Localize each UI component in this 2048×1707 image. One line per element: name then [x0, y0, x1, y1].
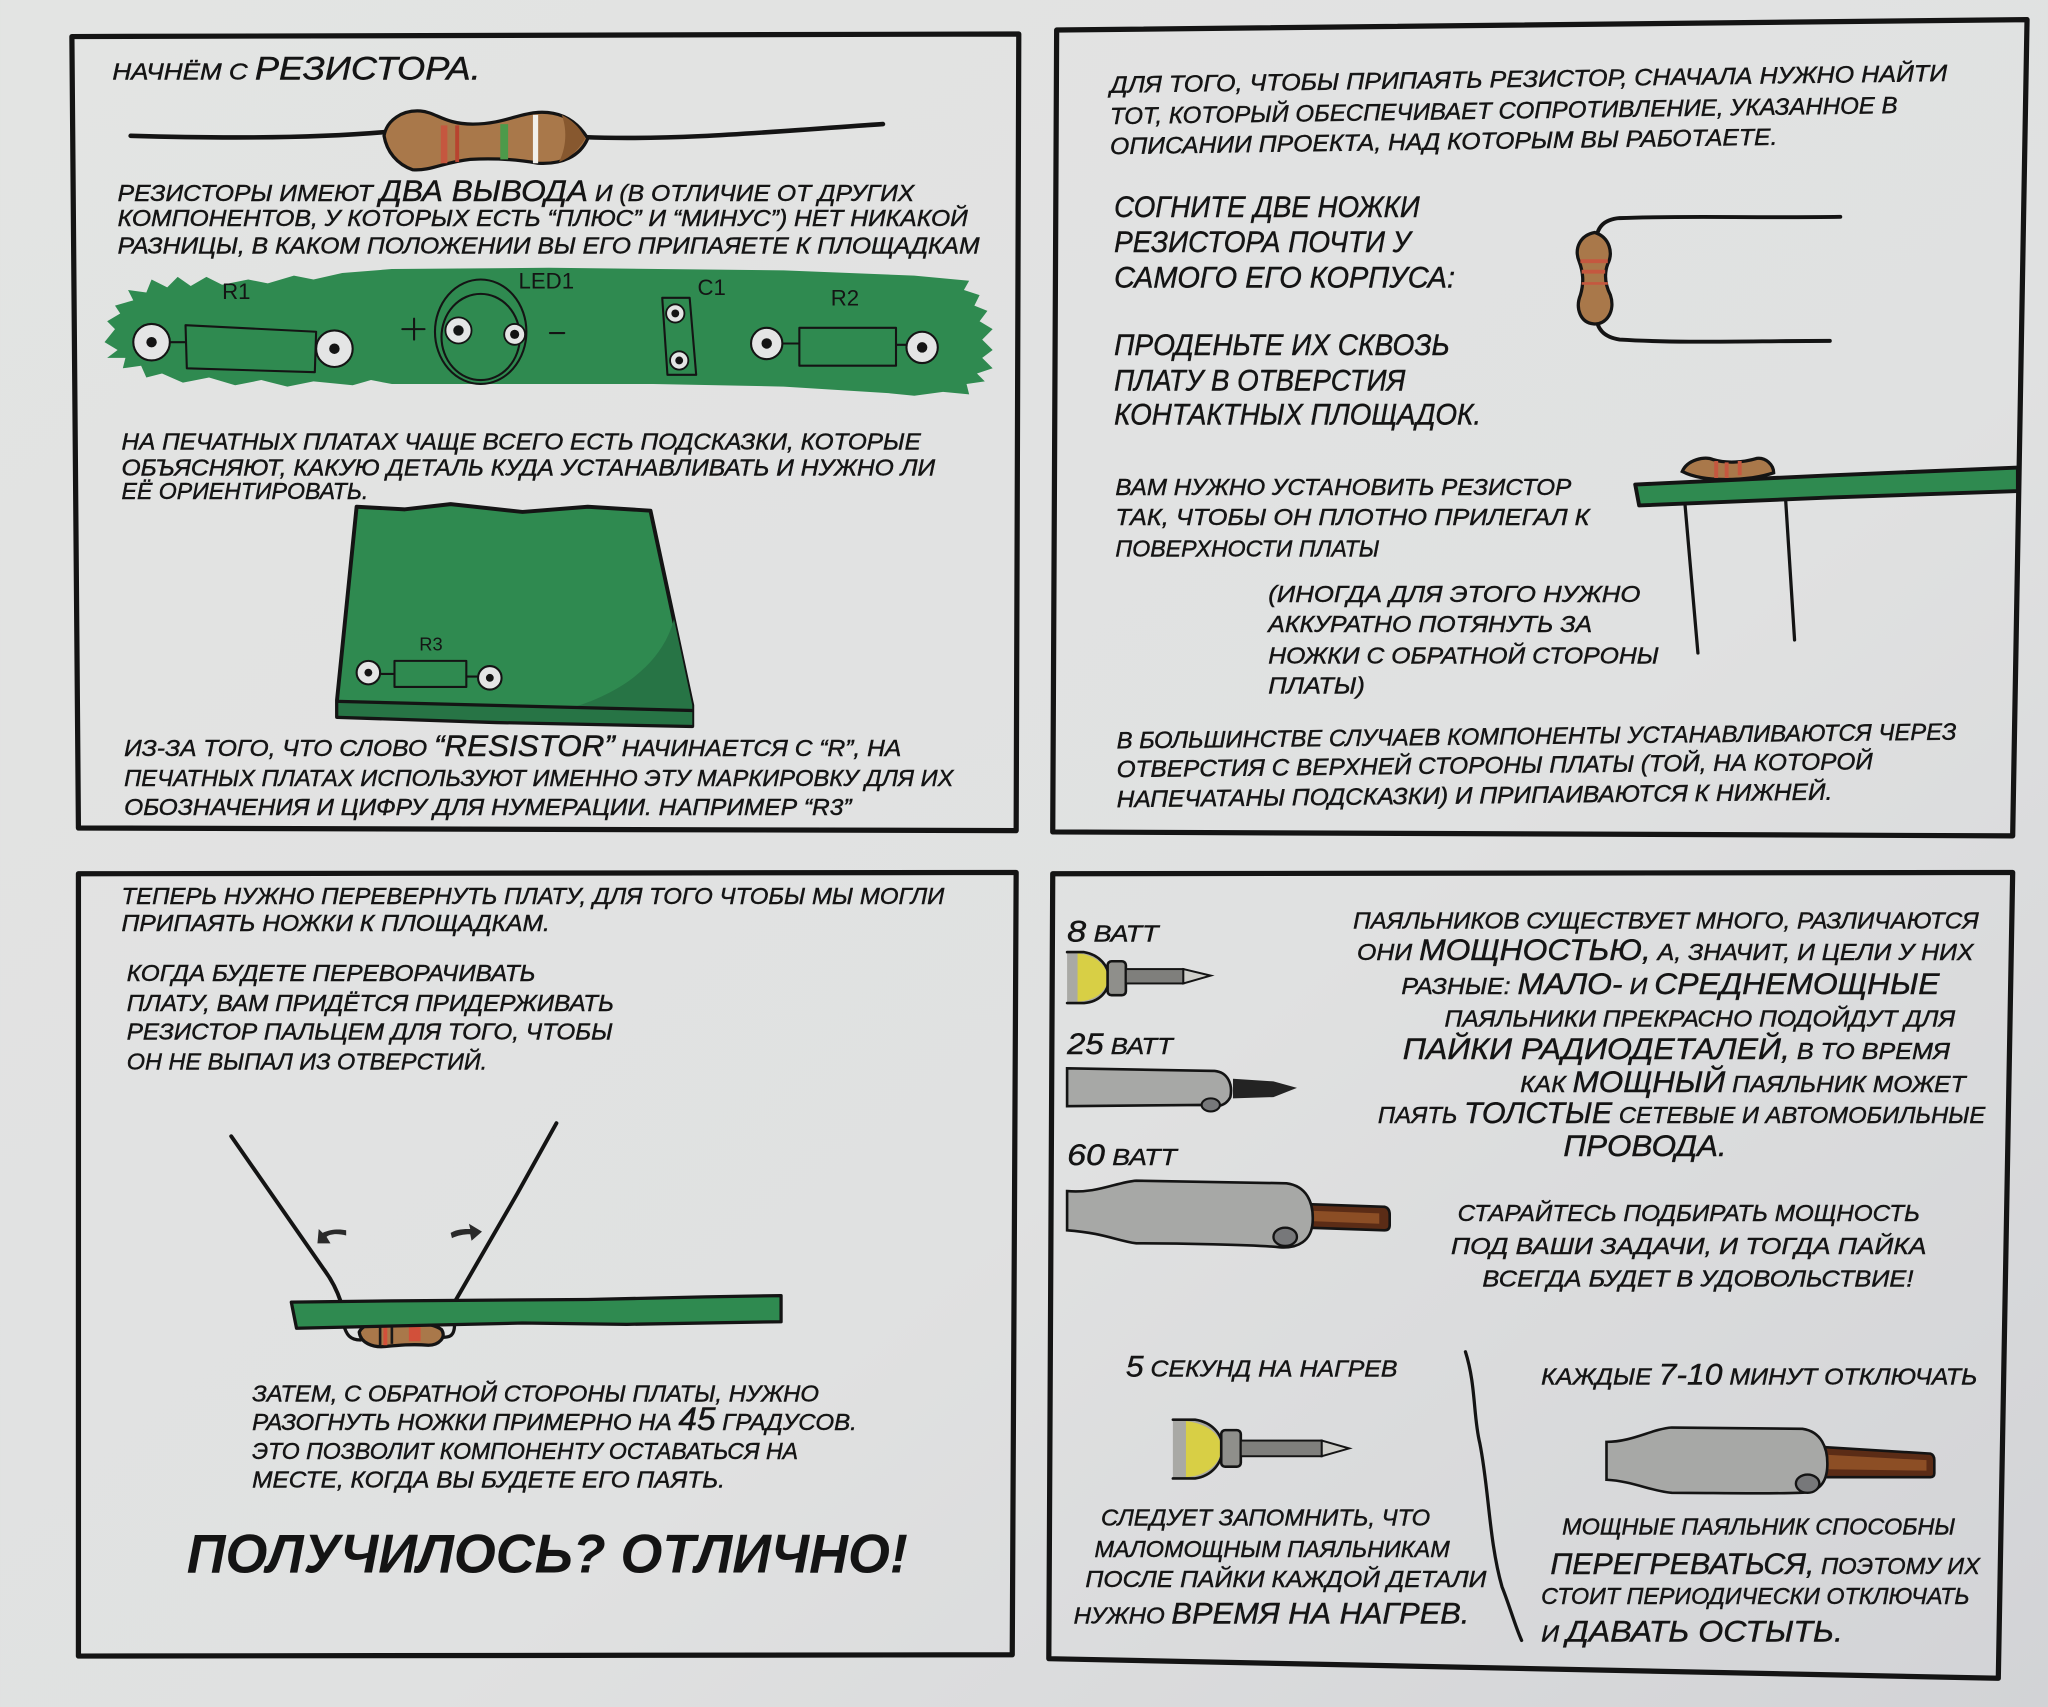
text block: bend the legs 45 degrees: МЕСТЕ, КОГДА ВЫ БУДЕТЕ ЕГО ПАЯТЬ.	[252, 1467, 725, 1493]
text block: resistors have two leads	[118, 175, 980, 258]
text block: bend the two legs: РЕЗИСТОРА ПОЧТИ У	[1114, 226, 1413, 259]
text block: hold the resistor with a finger: ОН НЕ ВЫПАЛ ИЗ ОТВЕРСТИЙ.	[127, 1048, 487, 1075]
text block: bend the legs 45 degrees	[252, 1379, 857, 1493]
text block: irons differ by power: ПАЯТЬ ТОЛСТЫЕ СЕТЕВЫЕ И АВТОМОБИЛЬНЫЕ	[1378, 1097, 1986, 1130]
text block: pick power for your tasks	[1451, 1199, 1926, 1291]
label: 60 watt: 60 ВАТТ	[1067, 1139, 1179, 1172]
icon: arrow left	[317, 1229, 346, 1243]
text block: thread through the holes: ПЛАТУ В ОТВЕРСТИЯ	[1114, 365, 1406, 398]
text block: gently pull the legs: АККУРАТНО ПОТЯНУТЬ ЗА	[1266, 611, 1592, 637]
text block: components go through from the top side: ОТВЕРСТИЯ С ВЕРХНЕЙ СТОРОНЫ ПЛАТЫ (ТОЙ, НА КОТОРОЙ	[1116, 747, 1873, 782]
text block: thread through the holes	[1114, 329, 1481, 431]
text block: high power irons can overheat: ПЕРЕГРЕВАТЬСЯ, ПОЭТОМУ ИХ	[1550, 1548, 1981, 1581]
text block: irons differ by power: КАК МОЩНЫЙ ПАЯЛЬНИК МОЖЕТ	[1520, 1065, 1967, 1099]
panel frame	[72, 34, 1019, 831]
text block: resistors have two leads: РЕЗИСТОРЫ ИМЕЮТ ДВА ВЫВОДА И (В ОТЛИЧИЕ ОТ ДРУГИХ	[118, 175, 916, 208]
text block: low power irons need time to heat: НУЖНО ВРЕМЯ НА НАГРЕВ.	[1074, 1597, 1469, 1630]
text block: find the right resistor	[1107, 59, 1948, 159]
text block: hold the resistor with a finger: ПЛАТУ, ВАМ ПРИДЁТСЯ ПРИДЕРЖИВАТЬ	[127, 990, 614, 1016]
text block: irons differ by power: РАЗНЫЕ: МАЛО- И СРЕДНЕМОЩНЫЕ	[1401, 968, 1941, 1001]
icon: high power iron	[1606, 1428, 1934, 1493]
panel: resistor introduction	[72, 34, 1019, 831]
text block: components go through from the top side: НАПЕЧАТАНЫ ПОДСКАЗКИ) И ПРИПАИВАЮТСЯ К НИЖНЕЙ.	[1116, 778, 1832, 812]
text block: irons differ by power	[1353, 908, 1986, 1163]
text block: gently pull the legs: НОЖКИ С ОБРАТНОЙ СТОРОНЫ	[1268, 641, 1659, 668]
text block: resistors have two leads: РАЗНИЦЫ, В КАКОМ ПОЛОЖЕНИИ ВЫ ЕГО ПРИПАЯЕТЕ К ПЛОЩАДКАМ	[118, 232, 980, 258]
text block: low power irons need time to heat: ПОСЛЕ ПАЙКИ КАЖДОЙ ДЕТАЛИ	[1085, 1565, 1487, 1592]
text block: resistors have two leads: КОМПОНЕНТОВ, У КОТОРЫХ ЕСТЬ “ПЛЮС” И “МИНУС”) НЕТ НИКАКОЙ	[118, 204, 968, 231]
text block: bend the legs 45 degrees: ЭТО ПОЗВОЛИТ КОМПОНЕНТУ ОСТАВАТЬСЯ НА	[252, 1438, 798, 1464]
illustration: circuit board strip with silkscreen hints: R2	[831, 286, 859, 311]
divider: hand-drawn curve between the two cases	[1465, 1352, 1522, 1640]
heading: start with the resistor: НАЧНЁМ С РЕЗИСТОРА.	[112, 50, 481, 87]
text block: high power irons can overheat: МОЩНЫЕ ПАЯЛЬНИК СПОСОБНЫ	[1562, 1514, 1955, 1540]
text block: hints on printed circuit boards: ЕЁ ОРИЕНТИРОВАТЬ.	[122, 478, 368, 504]
illustration: resistor with two leads	[131, 111, 883, 170]
text block: pick power for your tasks: ВСЕГДА БУДЕТ В УДОВОЛЬСТВИЕ!	[1482, 1265, 1914, 1291]
label: 25 watt: 25 ВАТТ	[1066, 1028, 1175, 1061]
icon: 60 watt soldering iron	[1067, 1181, 1390, 1247]
text block: fit tightly to the board: ТАК, ЧТОБЫ ОН ПЛОТНО ПРИЛЕГАЛ К	[1115, 504, 1591, 530]
icon: 8 watt soldering iron	[1067, 952, 1211, 1003]
illustration: circuit board strip with silkscreen hints	[105, 268, 993, 396]
text block: thread through the holes: КОНТАКТНЫХ ПЛОЩАДОК.	[1114, 398, 1481, 431]
text block: pick power for your tasks: ПОД ВАШИ ЗАДАЧИ, И ТОГДА ПАЙКА	[1451, 1232, 1926, 1259]
text block: bend the legs 45 degrees: РАЗОГНУТЬ НОЖКИ ПРИМЕРНО НА 45 ГРАДУСОВ.	[252, 1400, 857, 1437]
text block: low power irons need time to heat	[1074, 1504, 1487, 1630]
text block: hints on printed circuit boards: ОБЪЯСНЯЮТ, КАКУЮ ДЕТАЛЬ КУДА УСТАНАВЛИВАТЬ И НУЖНО ЛИ	[122, 454, 935, 480]
text block: pick power for your tasks: СТАРАЙТЕСЬ ПОДБИРАТЬ МОЩНОСТЬ	[1458, 1199, 1920, 1226]
label: 8 watt: 8 ВАТТ	[1067, 916, 1160, 949]
text block: hold the resistor with a finger: РЕЗИСТОР ПАЛЬЦЕМ ДЛЯ ТОГО, ЧТОБЫ	[127, 1019, 613, 1045]
text block: low power irons need time to heat: СЛЕДУЕТ ЗАПОМНИТЬ, ЧТО	[1101, 1504, 1430, 1530]
text block: find the right resistor: ТОТ, КОТОРЫЙ ОБЕСПЕЧИВАЕТ СОПРОТИВЛЕНИЕ, УКАЗАННОЕ В	[1110, 91, 1898, 129]
illustration: green board with R3 marking: R3	[419, 633, 443, 654]
text block: why the marking is R: ИЗ-ЗА ТОГО, ЧТО СЛОВО “RESISTOR” НАЧИНАЕТСЯ С “R”, НА	[124, 730, 901, 763]
text block: why the marking is R: ОБОЗНАЧЕНИЯ И ЦИФРУ ДЛЯ НУМЕРАЦИИ. НАПРИМЕР “R3”	[124, 794, 853, 820]
text block: irons differ by power: ПАЯЛЬНИКИ ПРЕКРАСНО ПОДОЙДУТ ДЛЯ	[1445, 1005, 1956, 1032]
text block: hints on printed circuit boards	[122, 428, 935, 504]
callout: did it work? great: ПОЛУЧИЛОСЬ? ОТЛИЧНО!	[187, 1522, 908, 1584]
panel frame	[1053, 20, 2027, 836]
text block: irons differ by power: ПРОВОДА.	[1563, 1130, 1727, 1163]
text block: gently pull the legs	[1266, 581, 1659, 699]
text block: find the right resistor: ДЛЯ ТОГО, ЧТОБЫ ПРИПАЯТЬ РЕЗИСТОР, СНАЧАЛА НУЖНО НАЙТИ	[1107, 59, 1948, 98]
text block: components go through from the top side	[1116, 719, 1957, 812]
text block: low power irons need time to heat: МАЛОМОЩНЫМ ПАЯЛЬНИКАМ	[1095, 1536, 1450, 1562]
text block: high power irons can overheat: И ДАВАТЬ ОСТЫТЬ.	[1541, 1616, 1843, 1649]
text block: hold the resistor with a finger: КОГДА БУДЕТЕ ПЕРЕВОРАЧИВАТЬ	[127, 960, 536, 986]
text block: bend the legs 45 degrees: ЗАТЕМ, С ОБРАТНОЙ СТОРОНЫ ПЛАТЫ, НУЖНО	[252, 1379, 819, 1406]
illustration: resistor with bent legs	[1577, 217, 1840, 342]
icon: low power iron	[1173, 1420, 1349, 1478]
panel: mounting the resistor	[1053, 20, 2027, 836]
text block: irons differ by power: ПАЙКИ РАДИОДЕТАЛЕЙ, В ТО ВРЕМЯ	[1403, 1032, 1951, 1066]
text block: fit tightly to the board: ВАМ НУЖНО УСТАНОВИТЬ РЕЗИСТОР	[1115, 474, 1572, 500]
text block: find the right resistor: ОПИСАНИИ ПРОЕКТА, НАД КОТОРЫМ ВЫ РАБОТАЕТЕ.	[1110, 124, 1778, 159]
text block: turn the board over: ПРИПАЯТЬ НОЖКИ К ПЛОЩАДКАМ.	[122, 910, 550, 936]
text block: irons differ by power: ПАЯЛЬНИКОВ СУЩЕСТВУЕТ МНОГО, РАЗЛИЧАЮТСЯ	[1353, 908, 1980, 934]
text block: bend the two legs: САМОГО ЕГО КОРПУСА:	[1114, 261, 1455, 294]
text block: gently pull the legs: (ИНОГДА ДЛЯ ЭТОГО НУЖНО	[1268, 581, 1640, 607]
illustration: upturned board with legs bent outwards	[231, 1123, 781, 1347]
text block: hold the resistor with a finger	[127, 960, 614, 1075]
illustration: green board with R3 marking	[337, 504, 692, 726]
text block: bend the two legs: СОГНИТЕ ДВЕ НОЖКИ	[1114, 191, 1420, 224]
panel frame	[1049, 872, 2013, 1678]
panel: flip the board and bend the legs	[78, 872, 1016, 1656]
text block: turn the board over	[122, 883, 945, 936]
text block: why the marking is R	[124, 730, 955, 820]
label: five seconds to heat: 5 СЕКУНД НА НАГРЕВ	[1126, 1351, 1398, 1384]
text block: turn the board over: ТЕПЕРЬ НУЖНО ПЕРЕВЕРНУТЬ ПЛАТУ, ДЛЯ ТОГО ЧТОБЫ МЫ МОГЛИ	[122, 883, 945, 909]
text block: high power irons can overheat	[1541, 1514, 1981, 1649]
icon: 25 watt soldering iron	[1067, 1068, 1297, 1111]
label: switch off every 7-10 minutes: КАЖДЫЕ 7-10 МИНУТ ОТКЛЮЧАТЬ	[1541, 1358, 1977, 1391]
illustration: circuit board strip with silkscreen hints: LED1	[519, 269, 574, 294]
icon: arrow right	[451, 1224, 482, 1241]
panel: soldering iron power	[1049, 872, 2013, 1678]
text block: fit tightly to the board	[1115, 474, 1591, 561]
text block: components go through from the top side: В БОЛЬШИНСТВЕ СЛУЧАЕВ КОМПОНЕНТЫ УСТАНАВЛИВАЮТСЯ ЧЕРЕЗ	[1117, 719, 1957, 753]
text block: fit tightly to the board: ПОВЕРХНОСТИ ПЛАТЫ	[1115, 535, 1379, 561]
illustration: resistor seated on the board	[1635, 458, 2018, 653]
text block: why the marking is R: ПЕЧАТНЫХ ПЛАТАХ ИСПОЛЬЗУЮТ ИМЕННО ЭТУ МАРКИРОВКУ ДЛЯ ИХ	[124, 765, 955, 791]
panel frame	[78, 872, 1016, 1656]
text block: gently pull the legs: ПЛАТЫ)	[1268, 673, 1365, 699]
text block: bend the two legs	[1114, 191, 1455, 294]
text block: thread through the holes: ПРОДЕНЬТЕ ИХ СКВОЗЬ	[1114, 329, 1450, 362]
text block: irons differ by power: ОНИ МОЩНОСТЬЮ, А, ЗНАЧИТ, И ЦЕЛИ У НИХ	[1357, 934, 1975, 967]
text block: hints on printed circuit boards: НА ПЕЧАТНЫХ ПЛАТАХ ЧАЩЕ ВСЕГО ЕСТЬ ПОДСКАЗКИ, КОТОРЫЕ	[122, 428, 921, 454]
illustration: circuit board strip with silkscreen hints: R1	[222, 279, 250, 304]
text block: high power irons can overheat: СТОИТ ПЕРИОДИЧЕСКИ ОТКЛЮЧАТЬ	[1541, 1583, 1970, 1609]
illustration: circuit board strip with silkscreen hints: C1	[697, 275, 726, 300]
